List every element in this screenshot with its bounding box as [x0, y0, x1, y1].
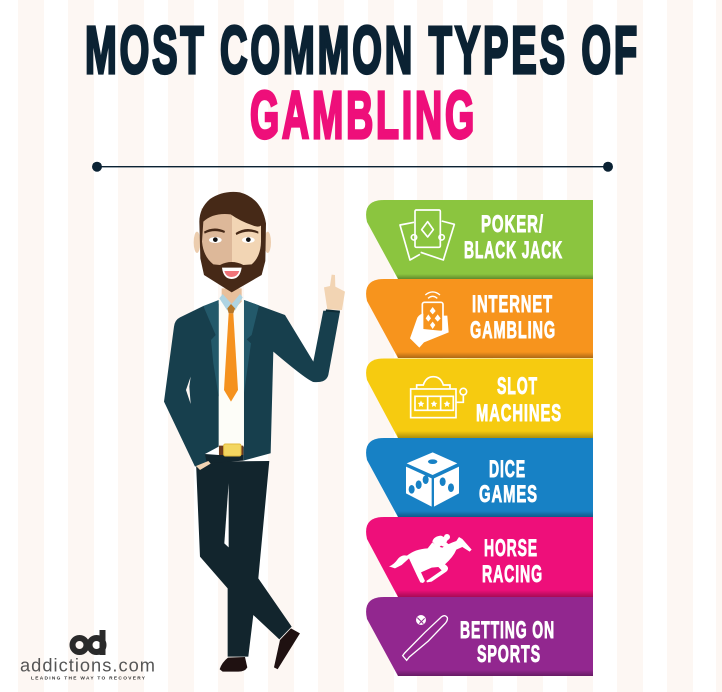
- label: POKER/: [481, 211, 544, 238]
- icon: die: [406, 452, 459, 507]
- label: SLOT: [497, 373, 538, 400]
- label: GAMES: [479, 481, 538, 508]
- label: INTERNET: [472, 291, 553, 318]
- label: MACHINES: [476, 400, 562, 427]
- logo wordmark: addictions.com: [20, 656, 156, 676]
- label: BLACK JACK: [464, 237, 563, 264]
- banner: poker / black jack: [366, 200, 593, 279]
- character head: [194, 192, 271, 292]
- logo: addictions.com: [20, 630, 156, 682]
- banner: slot machines: [366, 358, 593, 438]
- banner: betting on sports: [366, 597, 593, 676]
- label: BETTING ON: [460, 617, 555, 644]
- banner: dice games: [366, 438, 593, 517]
- title: GAMBLING: [250, 78, 477, 153]
- logo tagline: LEADING THE WAY TO RECOVERY: [31, 676, 146, 682]
- icon: hand holding phone: [410, 292, 449, 348]
- label: [482, 535, 543, 588]
- label: SPORTS: [477, 641, 541, 668]
- divider line with end dots: [92, 162, 613, 172]
- character: bearded businessman: [164, 192, 345, 672]
- label: RACING: [482, 561, 543, 588]
- character upper body: [164, 275, 345, 470]
- icon: playing cards: [400, 210, 454, 260]
- banner: internet gambling: [366, 279, 593, 358]
- banner: horse racing: [366, 517, 593, 597]
- label: [470, 291, 556, 344]
- icon: racehorse and jockey: [389, 534, 472, 583]
- label: DICE: [489, 456, 526, 483]
- logo mark: [72, 630, 104, 655]
- label: HORSE: [484, 535, 538, 562]
- icon: slot machine: [411, 377, 467, 418]
- label: GAMBLING: [470, 317, 556, 344]
- label: [460, 617, 555, 668]
- label: [476, 373, 562, 427]
- icon: baseball bat and ball: [403, 615, 447, 660]
- title: [85, 13, 640, 153]
- label: [479, 456, 538, 508]
- character legs and shoes: [196, 461, 300, 672]
- label: [464, 211, 563, 264]
